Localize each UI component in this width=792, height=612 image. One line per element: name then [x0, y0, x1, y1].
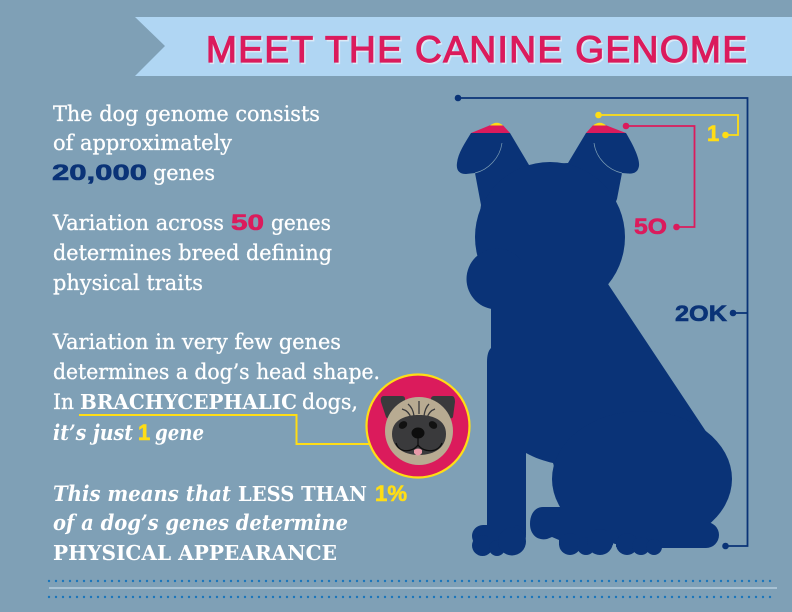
text block: 20,000 genes: genes — [153, 161, 215, 185]
ear tips — [471, 125, 510, 133]
front paw — [472, 525, 526, 547]
text block: head shape — [52, 330, 380, 445]
bracket: 50 — [623, 123, 694, 239]
bracket: 50: 5O — [634, 214, 667, 239]
text block: conclusion: This means that — [53, 481, 231, 506]
footer rules — [49, 581, 777, 597]
text block: head shape: BRACHYCEPHALIC — [80, 390, 297, 414]
text block: 50 genes: Variation across — [52, 211, 224, 235]
text block: 20,000 genes: of approximately — [53, 131, 232, 155]
text block: 50 genes: genes — [271, 211, 331, 235]
text block: head shape: 1 — [138, 420, 150, 445]
bracket: 1 — [595, 112, 738, 146]
text block: 50 genes: physical traits — [53, 271, 203, 295]
text block: head shape: Variation in very few genes — [52, 330, 341, 354]
text block: 20,000 genes — [52, 102, 320, 185]
title: MEET THE CANINE GENOME — [208, 30, 748, 72]
icon: pug face badge — [366, 374, 470, 478]
text block: 20,000 genes: The dog genome consists — [53, 102, 320, 126]
title banner — [135, 17, 792, 76]
text block: conclusion — [53, 481, 407, 565]
text block: head shape: determines a dog’s head shape. — [53, 360, 380, 384]
text block: head shape: it’s just — [53, 420, 133, 445]
text block: conclusion: LESS THAN — [238, 482, 367, 506]
text block: head shape: dogs, — [302, 390, 358, 414]
ear creases — [475, 143, 502, 173]
bracket: 1: 1 — [707, 121, 719, 146]
text block: 50 genes: determines breed defining — [53, 241, 332, 265]
text block: head shape: In — [53, 390, 74, 414]
text block: 50 genes — [52, 210, 332, 295]
title: MEET THE CANINE GENOME — [206, 29, 747, 70]
text block: conclusion: PHYSICAL APPEARANCE — [53, 541, 337, 565]
text block: head shape: gene — [155, 420, 204, 445]
text block: conclusion: of a dog’s genes determine — [53, 510, 348, 535]
bracket: 20K: 2OK — [675, 301, 727, 326]
bracket: 20K — [455, 95, 748, 549]
text block: 50 genes: 50 — [231, 210, 264, 235]
connector line from BRACHYCEPHALIC to pug — [79, 415, 370, 444]
text block: conclusion: 1% — [375, 481, 407, 506]
dog silhouette — [457, 123, 732, 556]
rear paw — [530, 507, 719, 548]
text block: 20,000 genes: 20,000 — [52, 160, 147, 185]
